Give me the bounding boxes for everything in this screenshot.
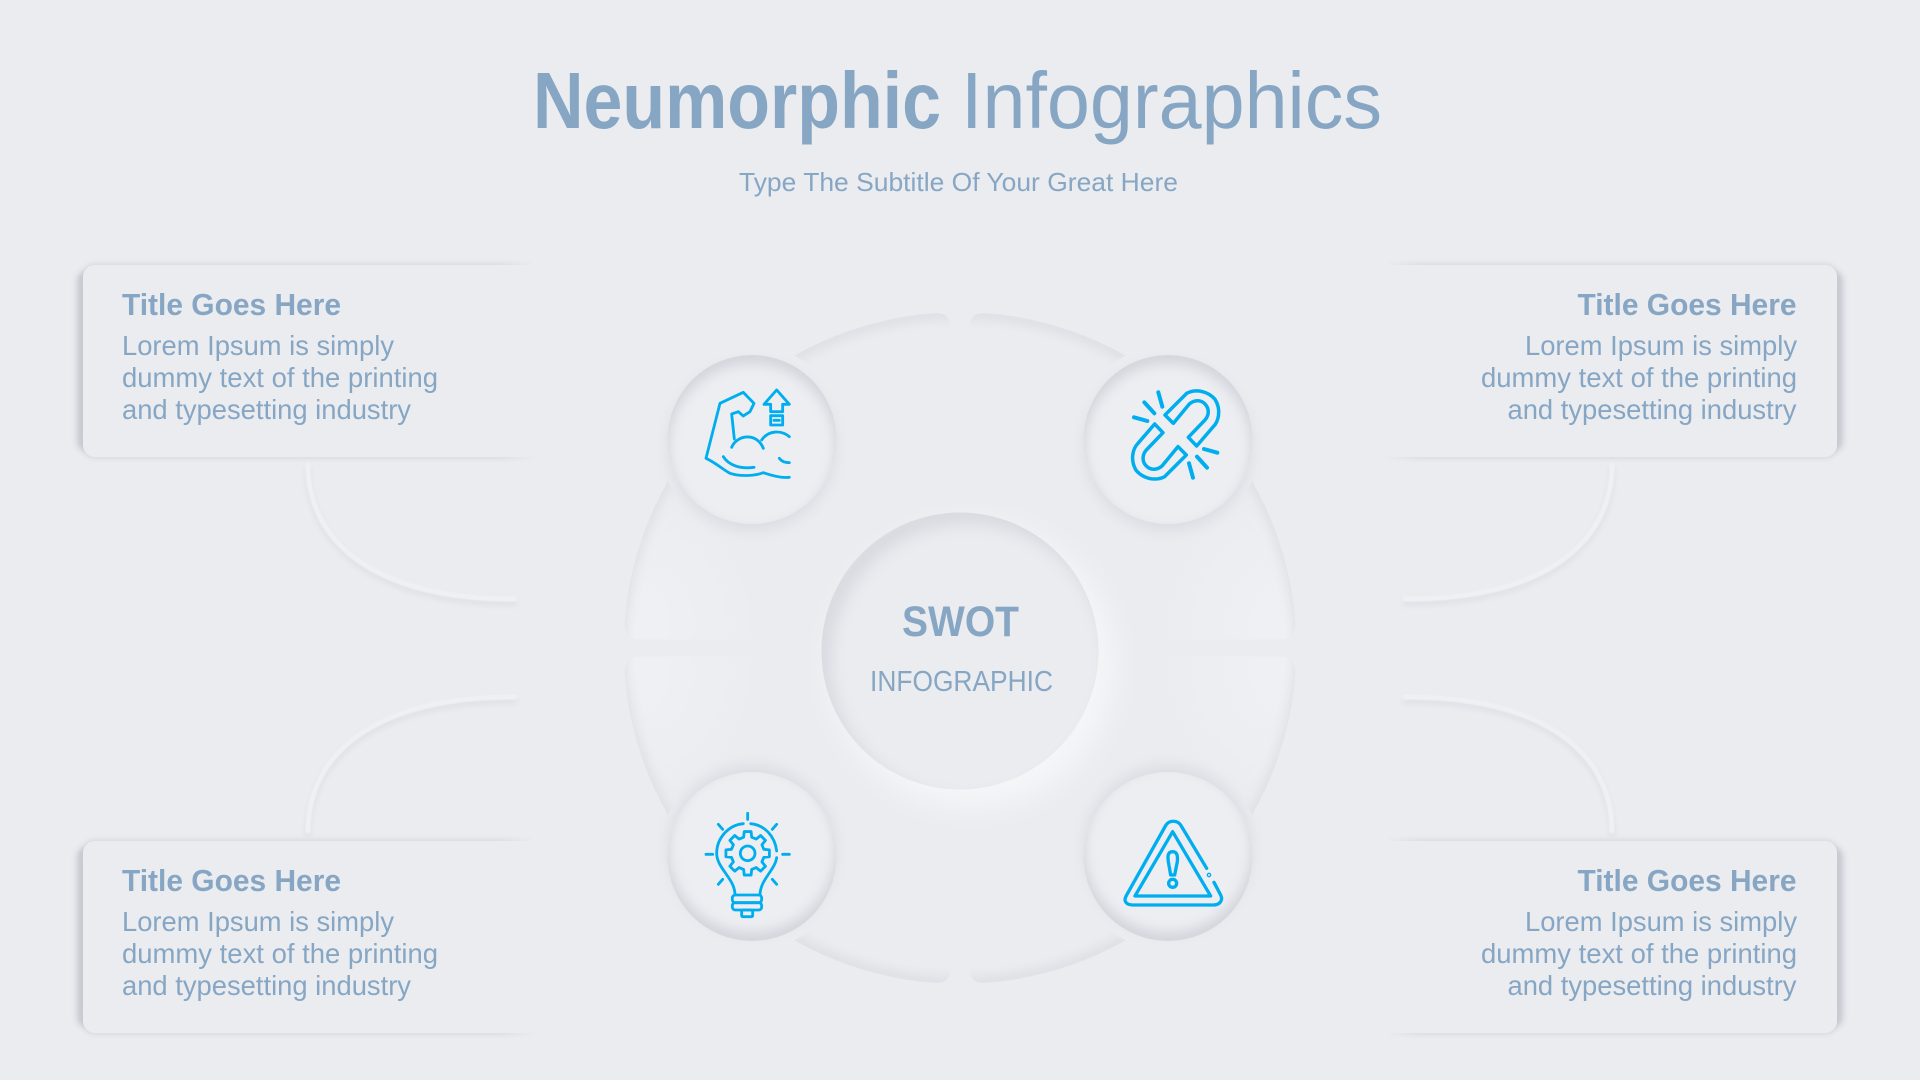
center disc glow: [830, 523, 1114, 807]
icon: flexed arm with up arrow: [706, 390, 789, 478]
interior fill hiding segment gaps: [770, 458, 1150, 838]
panel: top right card: [1367, 263, 1843, 459]
card body text: and typesetting industry: [122, 394, 411, 425]
card heading: Title Goes Here: [1578, 863, 1796, 898]
card body text: [122, 330, 438, 425]
card body text: [1481, 330, 1797, 425]
icon: light bulb with gear: [706, 813, 789, 917]
card heading: Title Goes Here: [1578, 287, 1796, 322]
card body text: [1481, 906, 1797, 1001]
panel: top left card: [77, 263, 553, 459]
card body text: dummy text of the printing: [122, 362, 438, 393]
center heading: SWOT: [902, 598, 1019, 646]
node: weaknesses: [1084, 355, 1252, 530]
card body text: and typesetting industry: [1508, 394, 1796, 425]
node: strengths: [668, 355, 836, 530]
card body text: dummy text of the printing: [1481, 362, 1797, 393]
center disc: [822, 512, 1098, 790]
icon: warning triangle: [1125, 821, 1222, 905]
card body text: and typesetting industry: [122, 970, 411, 1001]
title: Neumorphic: [533, 56, 941, 145]
card body text: Lorem Ipsum is simply: [1525, 330, 1797, 361]
subtitle: Type The Subtitle Of Your Great Here: [739, 167, 1178, 197]
card body text: Lorem Ipsum is simply: [122, 906, 394, 937]
card body text: and typesetting industry: [1508, 970, 1796, 1001]
panel: bottom left card: [77, 839, 553, 1035]
card heading: Title Goes Here: [122, 863, 341, 898]
connector arc: bottom right: [1405, 697, 1612, 835]
title: Infographics: [961, 56, 1382, 145]
card body text: dummy text of the printing: [1481, 938, 1797, 969]
ring segment: top left: [636, 313, 947, 558]
card body text: Lorem Ipsum is simply: [1525, 906, 1797, 937]
card body text: [122, 906, 438, 1001]
ring segment: bottom left: [638, 743, 946, 983]
card body text: Lorem Ipsum is simply: [122, 330, 394, 361]
node: threats: [1084, 765, 1252, 941]
node: opportunities: [668, 765, 836, 941]
card body text: dummy text of the printing: [122, 938, 438, 969]
connector arc: bottom left: [308, 697, 515, 835]
ring segment: bottom right: [973, 742, 1283, 983]
icon: broken chain link: [1133, 391, 1219, 479]
center subheading: INFOGRAPHIC: [870, 666, 1053, 698]
ring segment: top right: [972, 313, 1282, 553]
connector arc: top right: [1405, 465, 1612, 603]
card heading: Title Goes Here: [122, 287, 341, 322]
connector arc: top left: [308, 465, 515, 603]
panel: bottom right card: [1367, 839, 1843, 1035]
